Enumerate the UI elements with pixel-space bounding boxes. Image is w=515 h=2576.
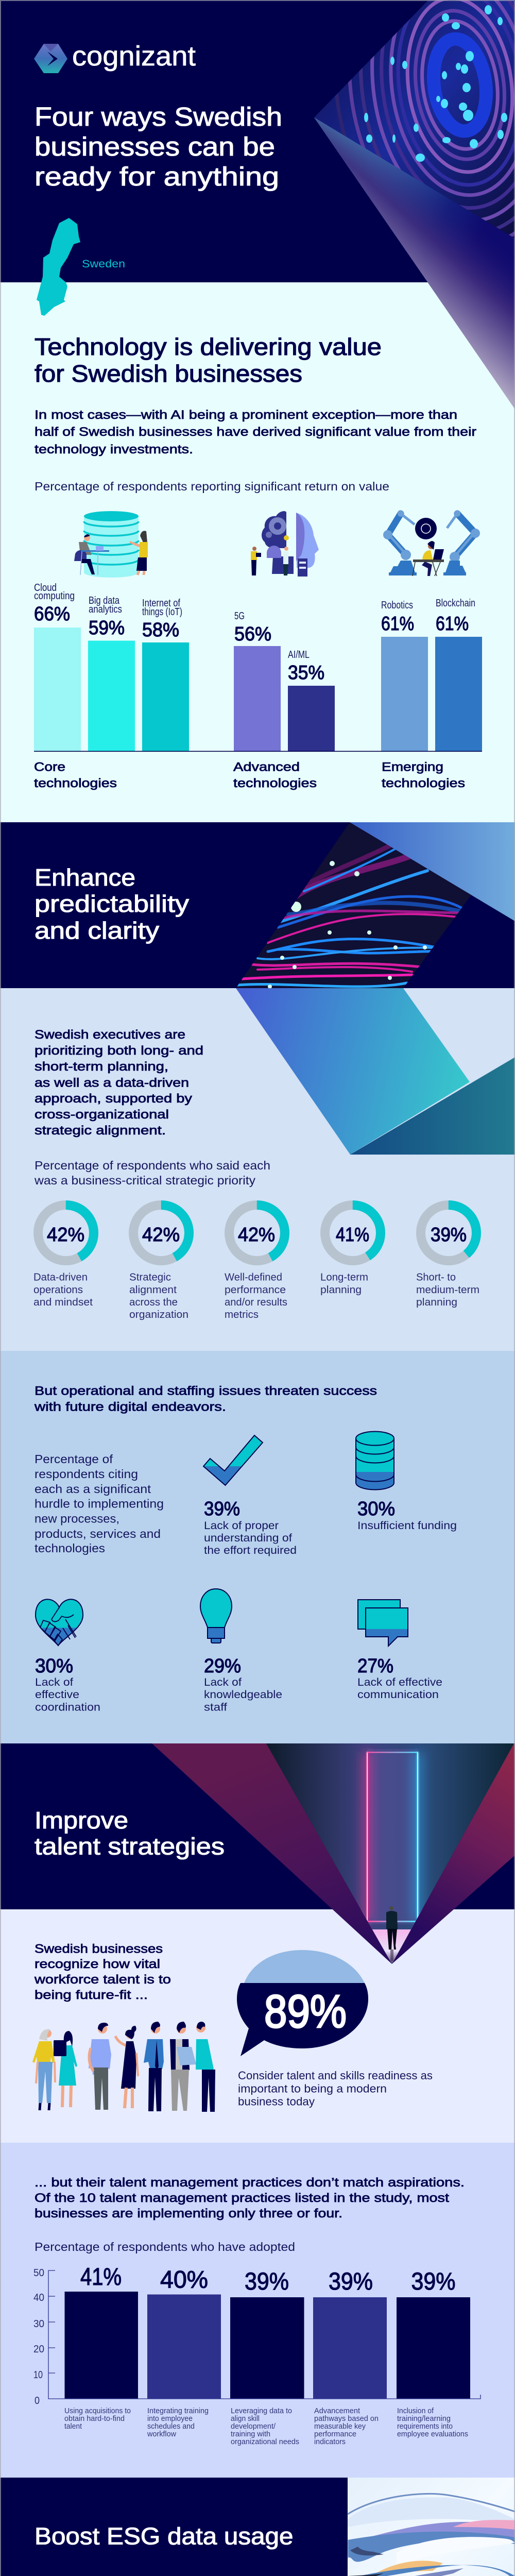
heading: But operational and staffing issues threaten success (35, 1384, 377, 1398)
donut charts: metrics (225, 1309, 259, 1320)
text block: respondents citing (35, 1467, 138, 1481)
bar chart: technologies: analytics (89, 604, 122, 615)
text block: Percentage of (35, 1452, 113, 1466)
text block: business today (238, 2095, 315, 2108)
title: businesses can be (35, 132, 275, 161)
text block: cross-organizational (35, 1108, 169, 1122)
bar chart: technologies: Robotics (381, 600, 413, 611)
chart subtitle: was a business-critical strategic priority (34, 1174, 256, 1187)
heading (35, 333, 382, 387)
bar chart: technologies: things (IoT) (142, 606, 182, 618)
photo: purple swirl of glowing fibres (314, 0, 515, 238)
map: Sweden: Sweden (82, 258, 125, 270)
intro text (35, 408, 476, 456)
bar chart: technologies: Cloud (34, 582, 57, 594)
bar chart: talent practices: schedules and (147, 2422, 195, 2431)
bar chart: technologies: Core (34, 760, 65, 774)
text block: as well as a data-driven (35, 1076, 189, 1090)
stat: knowledgeable staff (204, 1655, 282, 1714)
bar chart: talent practices: Using acquisitions to (64, 2406, 131, 2415)
text block (34, 1942, 171, 2002)
callout: 89%: 89% (264, 1986, 347, 2038)
bar chart: talent practices (33, 2263, 480, 2446)
bar chart: technologies: technologies (233, 776, 317, 790)
section title (35, 864, 189, 944)
stat: lack of proper understanding: 39% (204, 1498, 240, 1520)
donut charts: operations (33, 1284, 83, 1296)
panel: improve talent strategies (0, 1743, 515, 2143)
bar chart: technologies: 61% (436, 613, 469, 635)
stat: communication (357, 1655, 442, 1701)
illustration: group of seven colleagues (32, 2022, 215, 2112)
bar chart: technologies: 66% (34, 603, 70, 625)
gradient wedge (314, 117, 515, 409)
chart subtitle: Percentage of respondents who said each (35, 1159, 270, 1172)
text block: workforce talent is to (34, 1973, 171, 1987)
donut charts: alignment (129, 1284, 177, 1296)
bar chart: talent practices: organizational needs (231, 2437, 299, 2446)
title (35, 102, 282, 191)
bar chart: talent practices: 39% (245, 2267, 289, 2295)
bar chart: technologies: Emerging (382, 760, 443, 774)
stat: insufficient funding (357, 1498, 457, 1532)
bar chart: talent practices: 10 (33, 2369, 43, 2381)
photo: man facing neon doorway (263, 1743, 515, 1965)
donut charts: planning (320, 1284, 362, 1296)
icon: AI head (251, 511, 319, 577)
donut charts: 42% (47, 1224, 84, 1246)
stat: coordination: coordination (35, 1701, 100, 1714)
bar chart: talent practices: measurable key (314, 2422, 366, 2431)
bar chart: technologies: 59% (89, 617, 125, 639)
chart subtitle: Percentage of respondents who have adopted (35, 2240, 295, 2253)
chart subtitle: Percentage of respondents reporting significant return on value (35, 480, 389, 493)
bar chart: technologies: AI/ML (288, 649, 310, 660)
donut charts: Short- to (416, 1272, 456, 1283)
donut charts: across the (129, 1297, 178, 1308)
section title: Boost ESG data usage (35, 2522, 294, 2549)
text block: technologies (35, 1541, 105, 1555)
text block: new processes, (35, 1512, 119, 1525)
bar chart: technologies: 58% (142, 619, 179, 641)
photo: glowing blue and magenta light lines (232, 819, 479, 989)
text block: Of the 10 talent management practices listed in the study, most (35, 2191, 449, 2205)
bar chart: talent practices: 39% (411, 2267, 455, 2295)
stat: insufficient funding: Insufficient funding (357, 1520, 457, 1532)
heading: for Swedish businesses (35, 360, 302, 387)
text block: Swedish executives are (35, 1028, 185, 1042)
text block: ... but their talent management practices don’t match aspirations. (35, 2176, 465, 2190)
text block: each as a significant (35, 1482, 151, 1496)
text block: important to being a modern (238, 2082, 387, 2095)
donut charts: 42% (238, 1224, 275, 1246)
text block: prioritizing both long- and (35, 1044, 203, 1058)
bar chart: talent practices: 30 (33, 2318, 44, 2330)
bar chart: technologies: technologies (382, 776, 465, 790)
stat: communication: communication (357, 1689, 439, 1701)
donut charts: Data-driven (33, 1272, 88, 1283)
bar chart: talent practices: 40% (160, 2266, 208, 2293)
bar chart: talent practices: align skill (231, 2414, 260, 2423)
text block (35, 1452, 164, 1555)
bar chart: technologies: computing (34, 590, 75, 602)
donut charts: Strategic (129, 1272, 171, 1283)
stat: communication: 27% (357, 1655, 393, 1677)
icon: check mark (203, 1435, 263, 1485)
icon: database (356, 1431, 394, 1490)
bar chart: talent practices: 0 (35, 2395, 40, 2406)
panel: technology is delivering value (34, 333, 482, 790)
icon: database with two people (74, 511, 148, 578)
bar chart: talent practices: requirements into (397, 2422, 453, 2431)
logo: cognizant (72, 41, 196, 72)
icon: light bulb (200, 1589, 232, 1643)
bar chart: talent practices: into employee (147, 2414, 193, 2423)
text block: Swedish businesses (35, 1942, 163, 1956)
donut charts: performance (225, 1284, 286, 1296)
donut charts: 42% (142, 1224, 180, 1246)
intro text: half of Swedish businesses have derived significant value from their (35, 425, 476, 439)
donut charts: and mindset (33, 1297, 93, 1308)
bar chart: technologies: 56% (234, 623, 271, 645)
heading: Technology is delivering value (35, 333, 382, 360)
donut charts: planning (416, 1297, 457, 1308)
stat: knowledgeable staff: 29% (204, 1655, 241, 1677)
heading: with future digital endeavors. (34, 1400, 226, 1414)
text block: strategic alignment. (35, 1124, 166, 1138)
panel: hero (0, 0, 515, 822)
bar chart: talent practices: training with (231, 2430, 270, 2438)
panel: talent management practices (0, 2143, 515, 2478)
donut charts: and/or results (225, 1297, 287, 1308)
stat: coordination (35, 1655, 100, 1714)
bar chart: talent practices: talent (64, 2422, 82, 2431)
text block: Consider talent and skills readiness as (238, 2069, 433, 2082)
section title: Enhance (35, 864, 135, 891)
stat: lack of proper understanding: Lack of proper (204, 1520, 279, 1532)
bar chart: technologies (34, 582, 482, 790)
text block: products, services and (35, 1527, 161, 1540)
stat: lack of proper understanding (204, 1498, 297, 1556)
stat: coordination: effective (35, 1689, 79, 1701)
bar chart: technologies: technologies (34, 776, 117, 790)
donut charts: organization (129, 1309, 188, 1320)
panel: operational and staffing issues (0, 1351, 515, 1743)
title: Four ways Swedish (35, 102, 282, 131)
donut charts: 39% (431, 1224, 467, 1246)
chart subtitle (34, 1159, 270, 1187)
stat: communication: Lack of effective (357, 1676, 442, 1688)
bar chart: talent practices: Leveraging data to (231, 2406, 292, 2415)
bar chart: talent practices: 39% (329, 2267, 373, 2295)
section title: predictability (35, 890, 189, 917)
panel: strategic priorities (0, 988, 515, 1351)
bar chart: technologies: 35% (288, 662, 324, 684)
text block (35, 1028, 203, 1138)
title: ready for anything (35, 162, 279, 191)
bar chart: talent practices: 20 (33, 2344, 44, 2355)
bar chart: technologies: Internet of (142, 598, 180, 609)
section title: talent strategies (35, 1833, 225, 1860)
icon: speech bubbles (358, 1600, 408, 1646)
section title (35, 1807, 225, 1860)
stat: knowledgeable staff: staff (204, 1701, 227, 1714)
bar chart: technologies: 5G (234, 611, 245, 622)
text block: recognize how vital (35, 1957, 160, 1971)
photo: iridescent glass waves (348, 2478, 515, 2576)
bar chart: talent practices: Integrating training (147, 2406, 209, 2415)
stat: knowledgeable staff: knowledgeable (204, 1689, 282, 1701)
bar chart: technologies: Advanced (233, 760, 300, 774)
bar chart: talent practices: 50 (33, 2267, 44, 2279)
text block (238, 2069, 433, 2108)
bar chart: talent practices: Advancement (314, 2406, 360, 2415)
text block: approach, supported by (35, 1092, 192, 1106)
intro text: technology investments. (35, 443, 193, 456)
text block: short-term planning, (35, 1060, 168, 1074)
heading (34, 1384, 377, 1414)
bar chart: technologies: Big data (89, 595, 120, 606)
bar chart: talent practices: 40 (33, 2292, 44, 2303)
bar chart: talent practices: workflow (147, 2430, 176, 2438)
panel: boost ESG data usage banner (0, 2478, 515, 2576)
callout: 89% (237, 1950, 368, 2056)
donut charts (33, 1205, 479, 1320)
text block (35, 2176, 465, 2221)
bar chart: talent practices: indicators (314, 2437, 346, 2446)
bar chart: talent practices: Inclusion of (397, 2406, 434, 2415)
section title: and clarity (35, 917, 159, 944)
bar chart: talent practices: pathways based on (314, 2414, 379, 2423)
bar chart: talent practices: employee evaluations (397, 2430, 468, 2438)
map: Sweden (37, 218, 125, 316)
bar chart: talent practices: development/ (231, 2422, 276, 2431)
icon: handshake heart (36, 1599, 83, 1646)
stat: knowledgeable staff: Lack of (204, 1676, 242, 1688)
stat: lack of proper understanding: the effort required (204, 1545, 297, 1556)
intro text: In most cases—with AI being a prominent exception—more than (35, 408, 457, 422)
panel: enhance predictability banner (0, 819, 515, 989)
donut charts: 41% (336, 1224, 369, 1246)
donut charts: medium-term (416, 1284, 479, 1296)
bar chart: talent practices: training/learning (397, 2414, 451, 2423)
bar chart: talent practices: performance (314, 2430, 356, 2438)
text block: hurdle to implementing (35, 1497, 164, 1511)
bar chart: talent practices: 41% (80, 2263, 122, 2290)
text block: being future-fit ... (35, 1988, 148, 2002)
donut charts: Long-term (320, 1272, 368, 1283)
bar chart: technologies: Blockchain (436, 598, 475, 609)
bar chart: technologies: 61% (381, 613, 414, 635)
section title: Improve (35, 1807, 128, 1834)
text block: businesses are implementing only three or four. (35, 2207, 342, 2221)
icon: robot arms and gear (383, 511, 480, 576)
stat: lack of proper understanding: understanding of (204, 1532, 292, 1544)
bar chart: talent practices: obtain hard-to-find (64, 2414, 125, 2423)
donut charts: Well-defined (225, 1272, 282, 1283)
stat: coordination: Lack of (35, 1676, 73, 1688)
stat: insufficient funding: 30% (357, 1498, 395, 1520)
stat: coordination: 30% (35, 1655, 73, 1677)
